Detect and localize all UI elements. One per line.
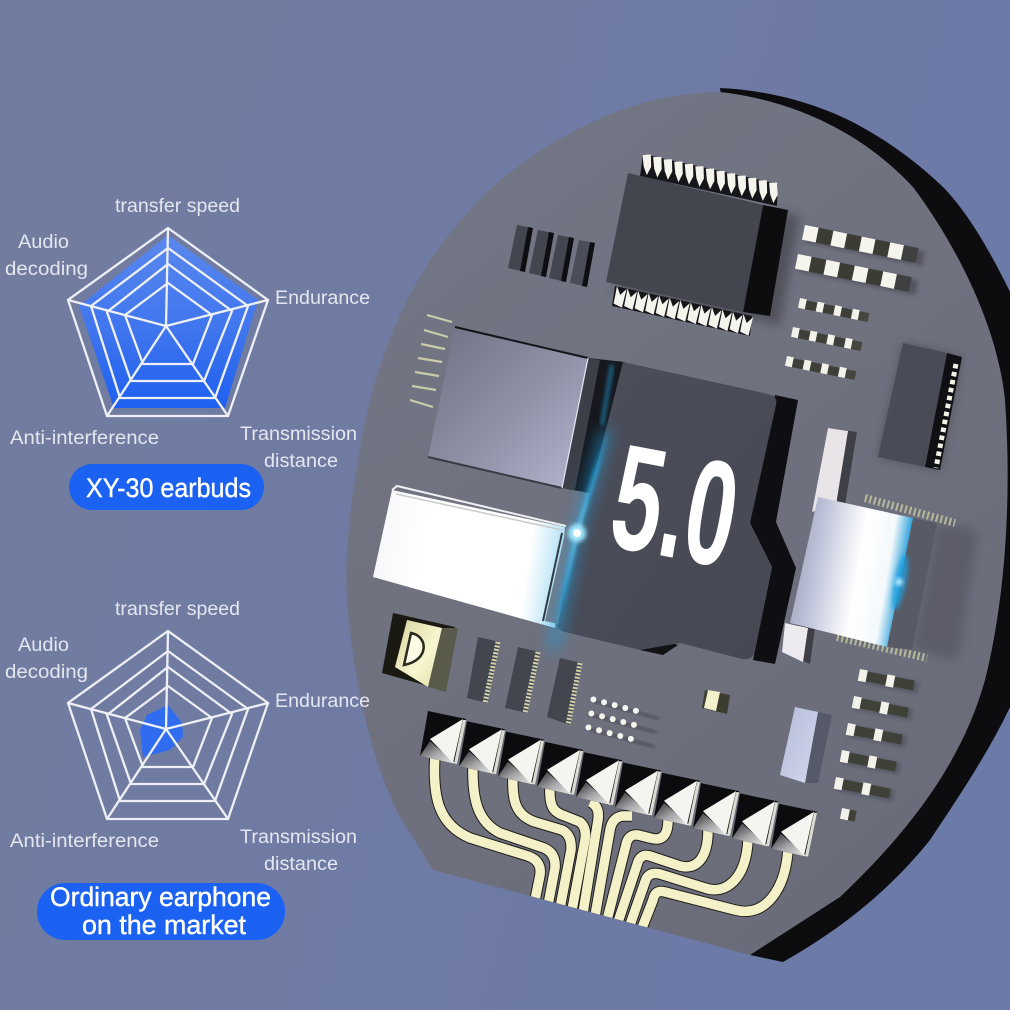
radar labels: ordinary earphone: distance	[264, 854, 338, 875]
radar labels: XY-30 earbuds: Transmission	[240, 424, 357, 445]
component: four-bar array	[508, 225, 595, 287]
pill: ordinary earphone on the market	[37, 882, 285, 940]
component: dot rows	[585, 696, 660, 748]
radar labels: XY-30 earbuds: transfer speed	[115, 196, 240, 217]
pill: ordinary earphone on the market: on the market	[82, 910, 246, 940]
panel: circuit board side edge	[720, 88, 1010, 962]
panel: circuit board	[346, 92, 1008, 955]
light beam: card seam	[553, 365, 612, 650]
radar chart: XY-30 earbuds	[68, 228, 268, 416]
component: resistor rows small	[785, 298, 870, 380]
chip: white shield block	[373, 486, 575, 628]
radar labels: ordinary earphone: Anti-interference	[10, 831, 159, 852]
component: three narrow ICs	[467, 637, 582, 725]
text: 5.0: 5.0	[601, 412, 750, 599]
chip: right flex connector	[782, 428, 978, 664]
radar fill: XY-30 earbuds	[79, 235, 258, 408]
radar labels: ordinary earphone	[5, 599, 370, 875]
radar labels: ordinary earphone: Endurance	[275, 691, 370, 712]
component: small gold cell	[702, 690, 730, 714]
radar labels: XY-30 earbuds: decoding	[5, 259, 88, 280]
radar fill: ordinary earphone	[140, 705, 183, 757]
pill: XY-30 earbuds: XY-30 earbuds	[86, 473, 251, 503]
chip: silver processor	[410, 315, 625, 495]
component: gold connector	[382, 613, 458, 692]
radar labels: XY-30 earbuds: Endurance	[275, 288, 370, 309]
radar labels: XY-30 earbuds	[5, 196, 370, 472]
radar labels: XY-30 earbuds: distance	[264, 451, 338, 472]
component: pyramid contact row	[420, 711, 817, 857]
chip: top processor	[606, 153, 800, 336]
radar labels: ordinary earphone: transfer speed	[115, 599, 240, 620]
pill: XY-30 earbuds	[69, 464, 264, 510]
component: gold traces	[434, 755, 788, 928]
chip: right small IC	[878, 343, 962, 470]
component: resistor rows large	[795, 225, 926, 295]
radar labels: ordinary earphone: Audio	[18, 635, 69, 656]
pill: ordinary earphone on the market: Ordinary earphone	[50, 882, 271, 912]
radar labels: ordinary earphone: decoding	[5, 662, 88, 683]
radar labels: XY-30 earbuds: Anti-interference	[10, 428, 159, 449]
radar labels: XY-30 earbuds: Audio	[18, 232, 69, 253]
chip: main Bluetooth card	[557, 362, 798, 664]
radar labels: ordinary earphone: Transmission	[240, 827, 357, 848]
radar chart: ordinary earphone	[68, 631, 268, 819]
component: resistor rows right	[834, 669, 919, 822]
component: lavender block	[780, 707, 832, 783]
